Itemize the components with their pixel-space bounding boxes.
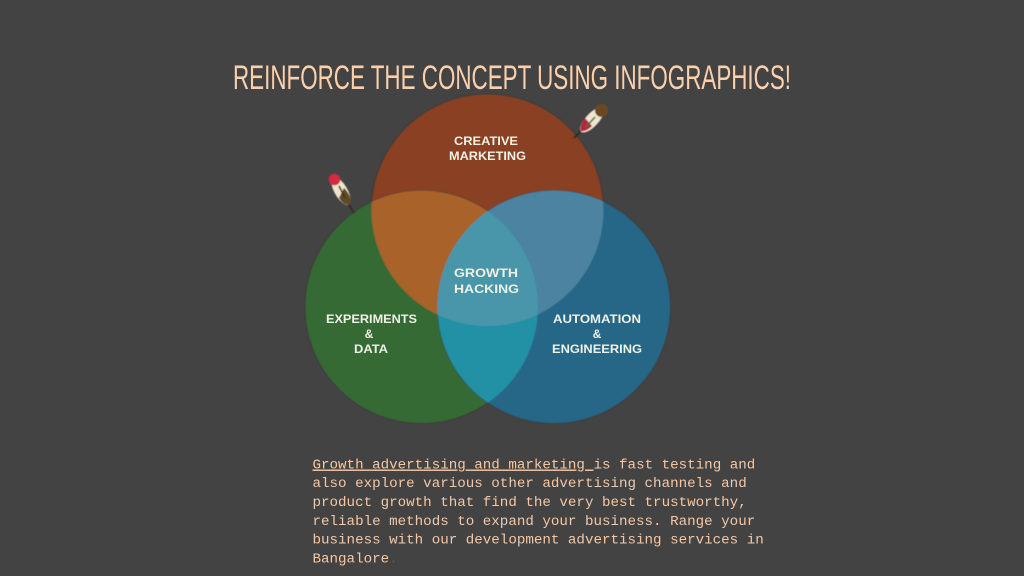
- overlap: creative and automation: [488, 190, 604, 314]
- label: automation and engineering: AUTOMATION: [553, 312, 641, 326]
- paragraph line 5: business with our development advertising services in: [312, 532, 764, 548]
- circle: automation and engineering: [438, 190, 670, 424]
- label: experiments and data: DATA: [354, 342, 388, 356]
- paragraph line 4: reliable methods to expand your business. Range your: [312, 514, 755, 530]
- label: growth hacking: GROWTH: [454, 266, 518, 280]
- label: automation and engineering: [552, 312, 642, 356]
- labels: [326, 134, 642, 356]
- body text: [312, 458, 764, 568]
- paragraph line 3: product growth that find the very best trustworthy,: [312, 495, 747, 511]
- link text: Growth advertising and marketing: [312, 458, 593, 474]
- label: experiments and data: [326, 312, 417, 356]
- circle: experiments and data: [305, 190, 538, 424]
- label: experiments and data: &: [365, 327, 374, 341]
- label: automation and engineering: &: [593, 327, 602, 341]
- overlap: growth hacking centre: [437, 212, 538, 326]
- venn diagram: [305, 94, 670, 424]
- label: growth hacking: [454, 266, 519, 296]
- label: creative marketing: CREATIVE: [454, 134, 518, 148]
- paragraph line 6: Bangalore.: [312, 552, 398, 568]
- icon: feather top left: [328, 174, 354, 213]
- label: automation and engineering: ENGINEERING: [552, 342, 642, 356]
- overlap: experiments and automation: [437, 313, 538, 404]
- label: experiments and data: EXPERIMENTS: [326, 312, 417, 326]
- label: creative marketing: MARKETING: [449, 149, 526, 163]
- icon: feather top right: [574, 104, 608, 138]
- label: creative marketing: [449, 134, 526, 163]
- overlap: creative and experiments: [370, 190, 488, 316]
- paragraph line 2: also explore various other advertising channels and: [312, 476, 747, 492]
- circle: creative marketing: [372, 94, 604, 326]
- label: growth hacking: HACKING: [454, 282, 519, 296]
- paragraph line 1: is fast testing and: [594, 458, 755, 474]
